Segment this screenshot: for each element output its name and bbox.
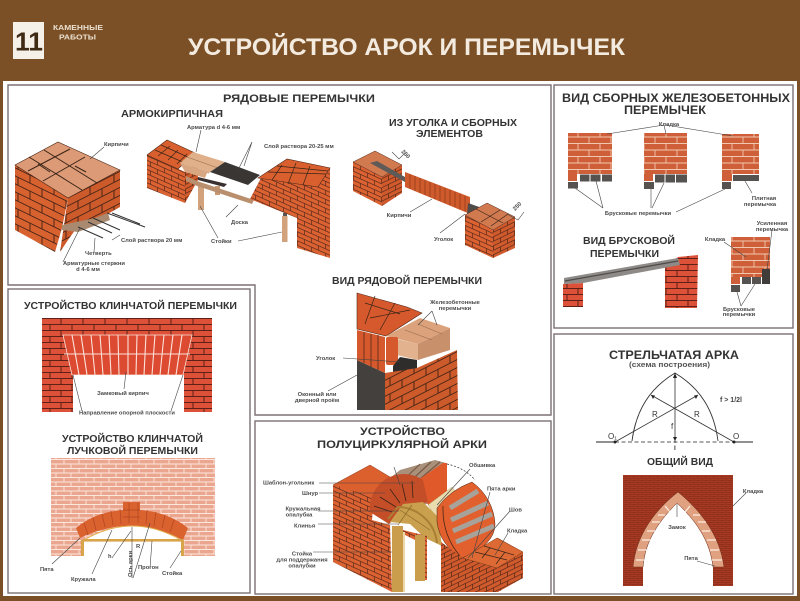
illustration: segmental wedge lintel: [51, 458, 215, 556]
labels: brick lintel: Арматура d 4-6 мм: [187, 125, 240, 131]
heading: wedge lintel: УСТРОЙСТВО КЛИНЧАТОЙ ПЕРЕМЫЧКИ: [24, 299, 237, 312]
labels: semicircular arch: Шов: [509, 508, 522, 514]
labels: reinforced lintel: Кладка: [705, 237, 726, 243]
labels: row lintel view: Железобетонные: [429, 299, 481, 306]
labels: segmental wedge lintel: [40, 523, 183, 583]
illustration: pointed arch wall: [623, 475, 733, 586]
labels: segmental wedge lintel: Стойка: [162, 570, 183, 577]
labels: row lintel view: [295, 299, 481, 404]
labels: semicircular arch: Кладка: [507, 528, 528, 534]
panel: wedge lintels: [24, 299, 237, 583]
labels: reinforced brick pier: Арматурные стержни: [63, 261, 125, 267]
labels: brick lintel: Доска: [231, 220, 249, 226]
diagram: arch construction: l: [674, 445, 676, 452]
labels: reinforced brick pier: [63, 142, 182, 273]
heading: segmental wedge lintel: [62, 432, 203, 457]
labels: semicircular arch: Шаблон-угольник: [263, 480, 314, 486]
labels: semicircular arch: Обшивка: [469, 462, 496, 469]
heading: semicircular arch: УСТРОЙСТВО: [360, 425, 445, 438]
heading: bar lintel view: [583, 234, 675, 260]
heading: segmental wedge lintel: УСТРОЙСТВО КЛИНЧАТОЙ: [62, 432, 203, 445]
heading: from angle and precast: ИЗ УГОЛКА И СБОРНЫХ: [389, 118, 517, 129]
panel: pointed arch: [596, 350, 764, 586]
heading: pointed arch: СТРЕЛЬЧАТАЯ АРКА: [609, 350, 739, 362]
diagram: arch construction: R: [694, 410, 700, 419]
labels: segmental wedge lintel: Ось арки: [128, 550, 134, 577]
heading: bar lintel view: ПЕРЕМЫЧКИ: [590, 249, 659, 260]
diagram: arch construction: f > 1/2l: [720, 397, 742, 404]
labels: semicircular arch: Пята арки: [487, 486, 516, 492]
labels: semicircular arch: Клинья: [294, 524, 315, 530]
heading: from angle and precast: ЭЛЕМЕНТОВ: [416, 129, 483, 140]
illustration: wall with bar lintels 1: [568, 133, 612, 188]
heading: semicircular arch: ПОЛУЦИРКУЛЯРНОЙ АРКИ: [317, 438, 487, 451]
labels: row lintel view: дверной проём: [295, 397, 339, 404]
labels: reinforced brick pier: d 4-6 мм: [76, 267, 100, 273]
illustration: wedge lintel: [42, 318, 212, 412]
labels: semicircular arch: опалубка: [286, 512, 313, 518]
labels: row lintel view: Оконный или: [298, 391, 337, 398]
section name: РАБОТЫ: [59, 32, 96, 42]
labels: reinforced lintel: перемычки: [723, 312, 756, 318]
labels: reinforced lintel: перемычка: [756, 227, 789, 233]
subheading: construction scheme: (схема построения): [629, 360, 711, 369]
illustration: reinforced brick pier: [15, 142, 145, 252]
labels: wedge lintel: [73, 372, 183, 416]
labels: angle lintel: 250: [512, 201, 523, 212]
labels: row lintel view: перемычки: [439, 306, 472, 312]
heading: precast lintels: [562, 93, 790, 117]
labels: pointed arch wall: Пята: [684, 556, 699, 562]
labels: pointed arch wall: Замок: [668, 525, 686, 531]
illustration: wall with plate lintel: [722, 134, 759, 189]
diagram: arch construction: O₁: [608, 432, 617, 441]
labels: angle lintel: [387, 149, 524, 243]
labels: wedge lintel: Замковый кирпич: [97, 390, 149, 397]
section name: КАМЕННЫЕ: [53, 23, 103, 32]
labels: semicircular arch: Кружальная: [285, 506, 321, 512]
illustration: angle lintel: [353, 151, 515, 258]
labels: semicircular arch: Шнур: [302, 491, 318, 497]
labels: reinforced brick pier: Четверть: [85, 251, 112, 257]
labels: reinforced lintel: Усиленная: [757, 221, 787, 227]
labels: precast lintels: Брусковые перемычки: [605, 211, 671, 217]
labels: segmental wedge lintel: R: [136, 544, 141, 550]
labels: reinforced lintel: Брусковые: [723, 307, 756, 313]
heading: precast lintels: ПЕРЕМЫЧЕК: [624, 105, 707, 117]
illustration: bar lintel on piers: [563, 255, 698, 308]
labels: angle lintel: Уголок: [434, 237, 453, 243]
panel: rows lintels: [15, 93, 524, 410]
labels: reinforced brick pier: Слой раствора 20 мм: [121, 237, 182, 244]
heading: from angle and precast: [389, 118, 517, 140]
diagram: arch construction: O: [733, 432, 739, 441]
labels: segmental wedge lintel: h: [108, 554, 112, 560]
diagram: arch construction: R: [652, 410, 658, 419]
labels: precast lintels: Кладка: [659, 122, 680, 128]
section number badge: 11: [15, 26, 43, 56]
heading: general view: ОБЩИЙ ВИД: [647, 455, 713, 468]
heading: precast lintels: ВИД СБОРНЫХ ЖЕЛЕЗОБЕТОННЫХ: [562, 93, 790, 105]
labels: brick lintel: Стойки: [211, 238, 232, 245]
illustration: brick lintel with rebar and board: [147, 140, 330, 258]
illustration: semicircular arch: [333, 460, 523, 592]
labels: segmental wedge lintel: Пята: [40, 567, 54, 573]
labels: precast lintels: перемычка: [744, 202, 777, 208]
heading: semicircular arch: [317, 425, 487, 451]
heading: segmental wedge lintel: ЛУЧКОВОЙ ПЕРЕМЫЧКИ: [67, 444, 198, 457]
diagram: arch construction: [596, 373, 753, 452]
labels: precast lintels: [575, 122, 777, 217]
labels: reinforced brick pier: Кирпичи: [104, 142, 129, 148]
labels: semicircular arch: опалубки: [288, 562, 316, 570]
heading: bar lintel view: ВИД БРУСКОВОЙ: [583, 234, 675, 247]
labels: pointed arch wall: Кладка: [743, 489, 764, 495]
labels: segmental wedge lintel: Кружала: [71, 577, 96, 583]
labels: segmental wedge lintel: Прогон: [138, 565, 159, 571]
labels: semicircular arch: [263, 462, 528, 570]
labels: angle lintel: 250: [400, 149, 411, 160]
labels: semicircular arch: для поддержания: [276, 558, 328, 564]
panel: semicircular arch: [263, 425, 528, 592]
labels: angle lintel: Кирпичи: [387, 213, 412, 219]
illustration: wall with bar lintels 2: [644, 133, 687, 189]
labels: reinforced lintel: [705, 221, 789, 318]
diagram: arch construction: f: [671, 422, 674, 431]
labels: brick lintel: [187, 125, 334, 245]
labels: row lintel view: Уголок: [316, 356, 335, 362]
panel: precast lintels: [562, 93, 790, 318]
heading: row lintels: РЯДОВЫЕ ПЕРЕМЫЧКИ: [223, 93, 375, 105]
illustration: row lintel view: [357, 293, 458, 410]
heading: reinforced brick: АРМОКИРПИЧНАЯ: [121, 109, 223, 120]
labels: precast lintels: Плитная: [752, 196, 776, 202]
heading: row lintel view: ВИД РЯДОВОЙ ПЕРЕМЫЧКИ: [332, 274, 482, 287]
labels: semicircular arch: Стойка: [292, 550, 313, 558]
section name: [53, 23, 103, 42]
labels: pointed arch wall: [668, 489, 764, 566]
title: УСТРОЙСТВО АРОК И ПЕРЕМЫЧЕК: [188, 33, 625, 61]
labels: brick lintel: Слой раствора 20-25 мм: [264, 143, 334, 150]
illustration: wall with reinforced lintel: [731, 237, 770, 292]
labels: wedge lintel: Направление опорной плоскости: [79, 410, 175, 416]
